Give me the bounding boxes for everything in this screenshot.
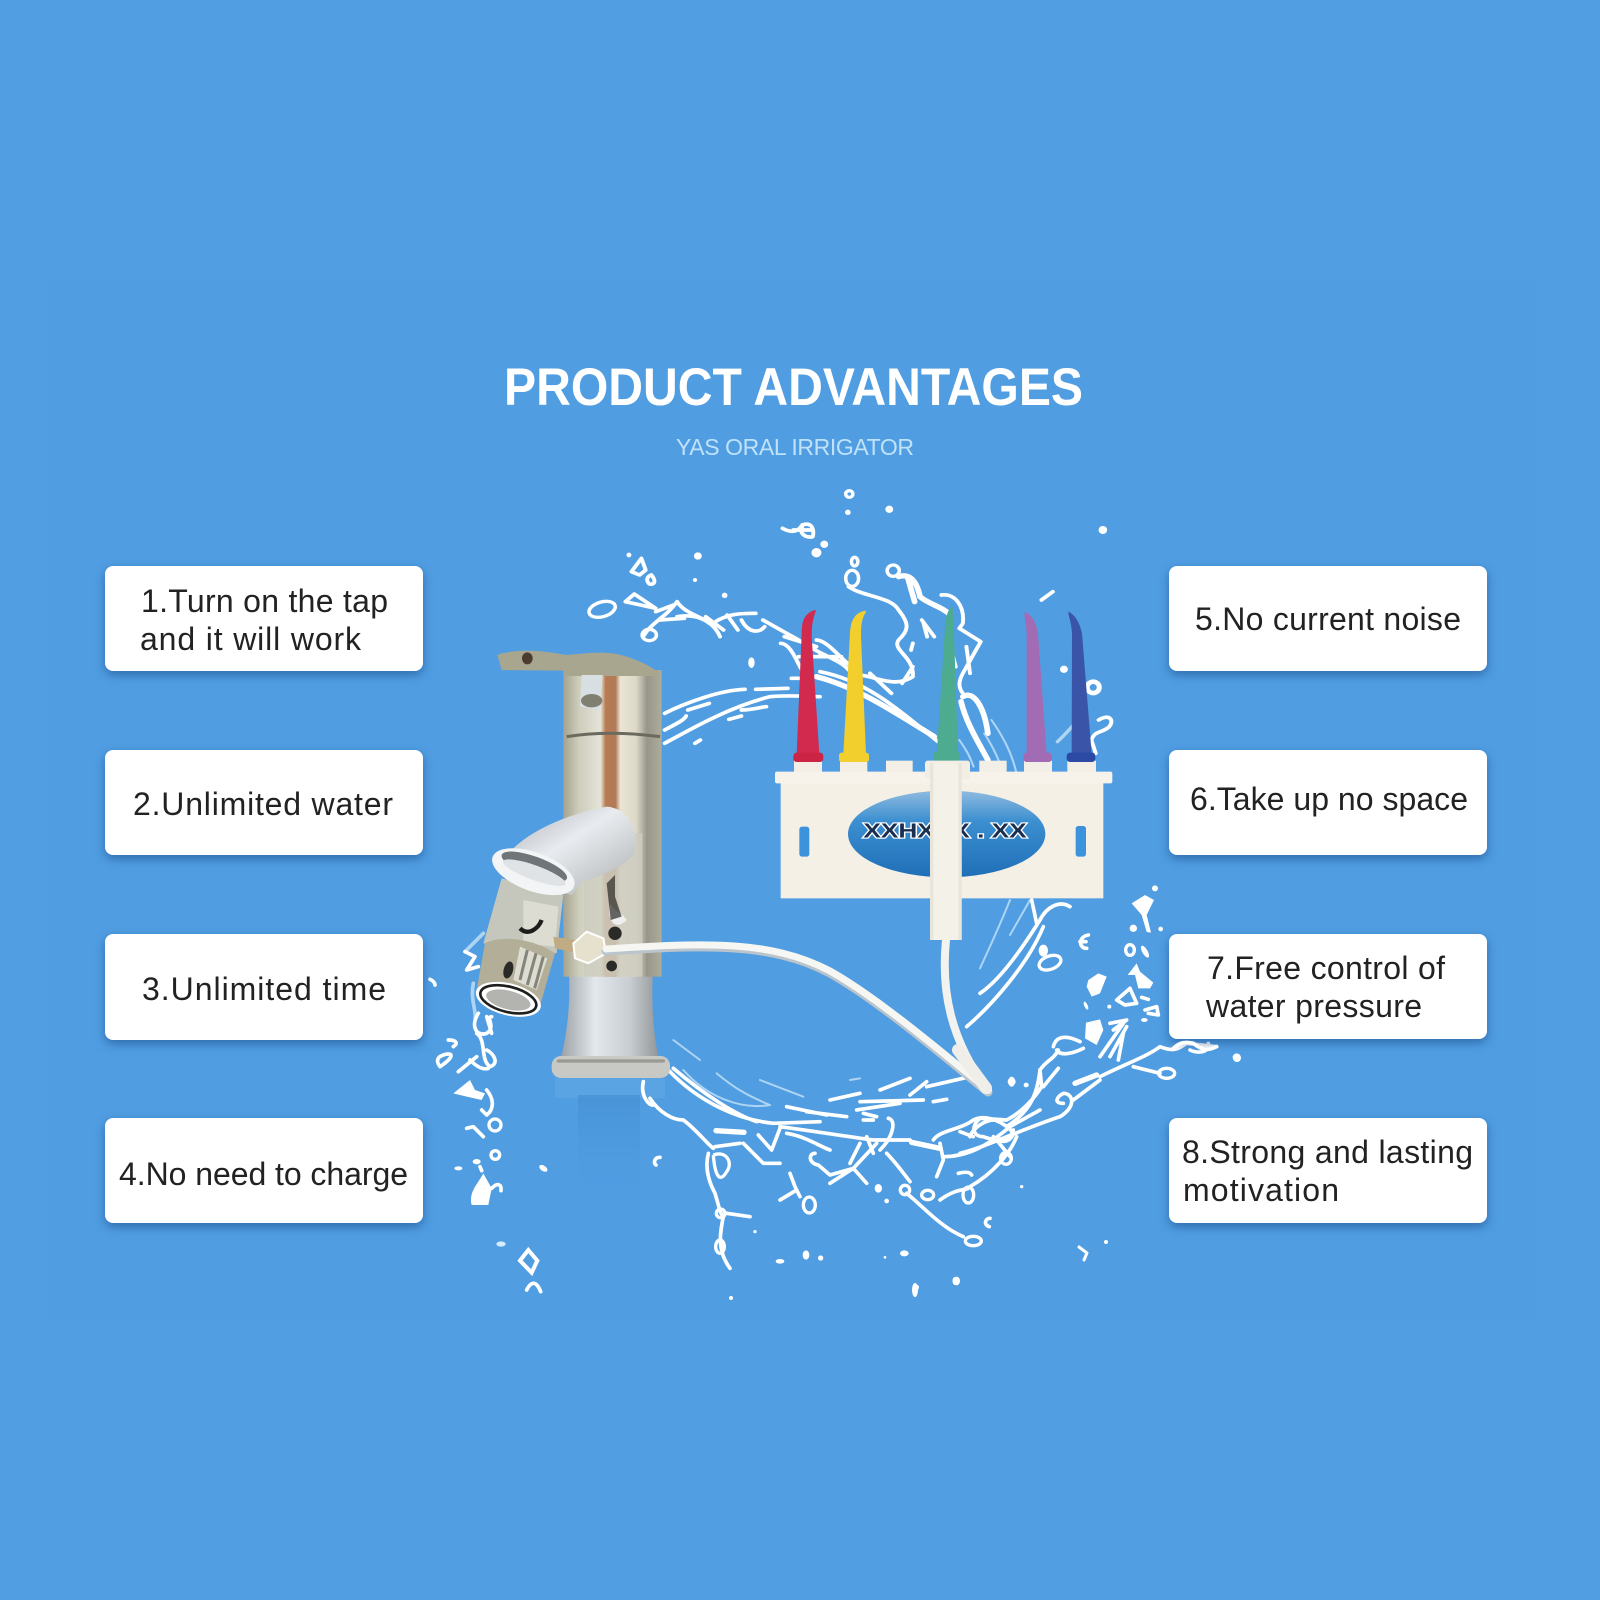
card 1: and it will work xyxy=(140,621,362,657)
vertical tube xyxy=(925,761,970,940)
faucet: body xyxy=(563,670,662,977)
card 3 xyxy=(105,934,423,1040)
water splash xyxy=(430,491,1241,1300)
card 6: 6.Take up no space xyxy=(1190,781,1468,817)
subtitle: YAS ORAL IRRIGATOR xyxy=(676,434,914,460)
card 5 xyxy=(1169,566,1487,671)
mount slots xyxy=(799,826,1086,857)
card 5: 5.No current noise xyxy=(1195,601,1461,637)
nozzle: yellow xyxy=(839,611,869,762)
card 4 xyxy=(105,1118,423,1223)
faucet: flared foot xyxy=(552,1056,670,1078)
faucet: lower base xyxy=(560,967,660,1062)
card 8: 8.Strong and lasting xyxy=(1182,1134,1473,1170)
faucet: diverter xyxy=(477,878,563,1008)
card 7 xyxy=(1169,934,1487,1039)
splash: upper region xyxy=(587,491,1111,773)
faucet reflection xyxy=(555,1078,665,1205)
card 8 xyxy=(1169,1118,1487,1223)
wall mount irrigator xyxy=(775,607,1112,940)
card 1 xyxy=(105,566,423,671)
faucet: spout xyxy=(498,807,636,895)
card 4: 4.No need to charge xyxy=(119,1156,408,1192)
faucet: collar xyxy=(486,839,581,905)
splash fragment over card 7 corner xyxy=(1173,1042,1217,1049)
nozzle: blue xyxy=(1067,612,1095,762)
faucet: brass fitting xyxy=(553,927,622,971)
splash: bottom region xyxy=(643,1040,1040,1290)
card 6 xyxy=(1169,750,1487,855)
card 8: motivation xyxy=(1183,1172,1339,1208)
pegs xyxy=(794,761,1096,777)
splash: left dribble xyxy=(430,933,549,1292)
nozzle: green xyxy=(933,607,960,761)
card 7: water pressure xyxy=(1205,988,1422,1024)
faucet: aerator opening xyxy=(472,976,545,1023)
faucet xyxy=(472,651,670,1078)
splash: right region xyxy=(960,885,1241,1157)
card 7: 7.Free control of xyxy=(1207,950,1445,986)
stray droplets xyxy=(729,820,1241,1300)
holder top lip xyxy=(775,772,1112,783)
tube: white hose from faucet to splitter xyxy=(606,940,988,1092)
holder panel xyxy=(781,778,1103,898)
faucet: handle xyxy=(497,651,662,710)
card 3: 3.Unlimited time xyxy=(142,971,386,1007)
card 1: 1.Turn on the tap xyxy=(141,583,388,619)
nozzle: red xyxy=(793,610,823,762)
card 2 xyxy=(105,750,423,855)
logo oval xyxy=(848,791,1045,877)
logo oval: XXHXXX . XX xyxy=(863,819,1027,842)
nozzle: purple xyxy=(1023,612,1052,762)
title: PRODUCT ADVANTAGES xyxy=(504,358,1083,417)
card 2: 2.Unlimited water xyxy=(133,786,393,822)
